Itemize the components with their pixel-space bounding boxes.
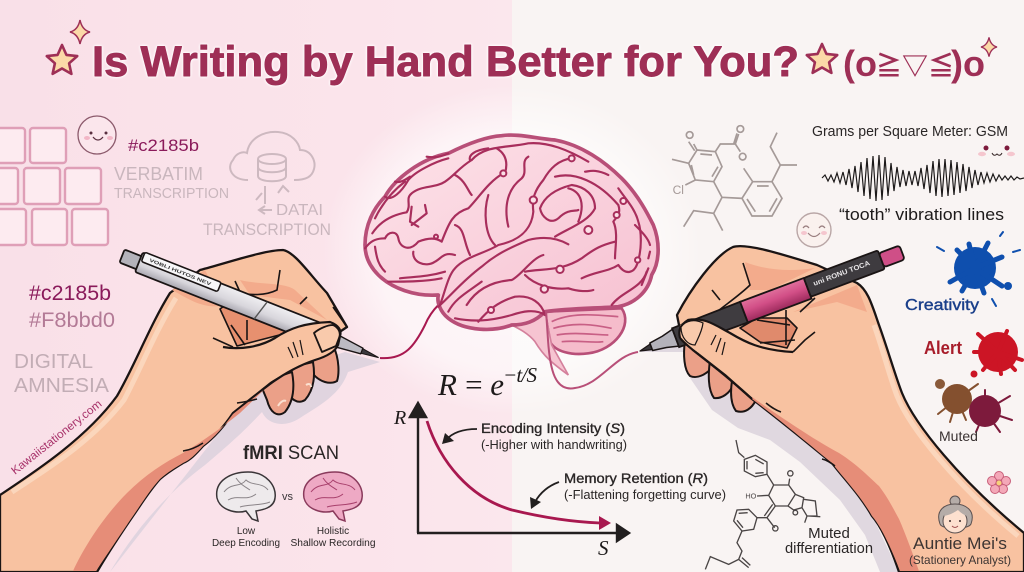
equation: R = e <box>437 367 504 402</box>
text: Auntie Mei's credit: (Stationery Analyst) <box>909 553 1011 567</box>
sulci <box>365 143 650 322</box>
pen tip cone <box>335 336 364 357</box>
label: muted: Muted <box>939 428 978 444</box>
retention curve <box>427 421 600 523</box>
splat: red alert <box>970 331 1022 378</box>
pen needle <box>361 349 380 360</box>
small brain captions <box>212 526 376 549</box>
text: GSM: Grams per Square Meter: GSM <box>812 123 1008 140</box>
small pink brain <box>304 472 362 521</box>
icon: smiley right <box>797 213 831 247</box>
text: muted differentiation <box>785 525 873 557</box>
pen body <box>740 278 812 322</box>
callout: encoding intensity: (-Higher with handwriting) <box>481 437 627 452</box>
pen grip <box>672 302 748 348</box>
pen needle tip <box>639 344 652 354</box>
cerebrum outline <box>365 135 658 329</box>
pen collar <box>254 300 267 321</box>
callout arrow memory <box>530 482 559 509</box>
text: colour codes and digital amnesia: DIGITAL <box>14 351 93 373</box>
background: right paper half <box>512 0 1024 572</box>
text: website along arm: Kawaiistationery.com <box>9 398 104 477</box>
title sparkle right <box>981 37 997 57</box>
fMRI comparison <box>212 443 376 549</box>
molecule chlorine label: Cl <box>673 183 684 197</box>
icon: flower <box>988 472 1010 494</box>
cerebellum <box>545 308 625 354</box>
text: muted differentiation: differentiation <box>785 540 873 557</box>
pen barrel <box>135 252 329 346</box>
kaomoji: )o <box>951 43 985 84</box>
text: Auntie Mei's credit <box>909 534 1011 567</box>
vs label: vs <box>282 491 294 503</box>
title sparkle left <box>70 20 90 44</box>
y axis <box>410 403 426 533</box>
ink line right pen to brainstem <box>546 310 638 388</box>
fMRI heading: fMRI SCAN <box>243 443 339 464</box>
pen brand text: VOBLI HUTOS NEV <box>149 258 213 287</box>
chart: forgetting curve <box>393 403 726 560</box>
text: Auntie Mei's credit: Auntie Mei's <box>913 534 1007 553</box>
small brain captions: Low <box>237 526 256 537</box>
kaomoji: ≧▽≦ <box>876 51 954 81</box>
text: tooth vibration lines: “tooth” vibration lines <box>839 205 1004 224</box>
keyboard keys <box>0 128 108 245</box>
palm recess <box>220 303 287 346</box>
thumbnail <box>681 321 703 345</box>
thumb wrinkles <box>288 340 303 358</box>
pen end cap <box>879 245 905 267</box>
wrist creases <box>183 399 257 451</box>
title <box>47 20 997 86</box>
text: data transcription: DATAI <box>276 202 323 219</box>
lower fingers <box>684 340 756 412</box>
thumbnail <box>314 325 340 352</box>
thumb outline <box>223 322 341 390</box>
splat: muted brown and maroon <box>935 379 1012 432</box>
callout: memory retention: Memory Retention ( R) <box>564 470 708 486</box>
knuckle creases <box>213 270 347 347</box>
pen tip collar <box>319 327 341 351</box>
equation: −t/S <box>503 363 538 387</box>
small brain captions: Shallow Recording <box>290 538 376 549</box>
retention curve arrowhead <box>599 516 611 530</box>
callout arrow encoding <box>442 429 477 444</box>
pen clip <box>141 252 221 292</box>
text: colour codes and digital amnesia: AMNESIA <box>14 375 110 397</box>
title star left <box>47 45 77 74</box>
lower fingers <box>262 345 338 414</box>
axis label S: S <box>598 536 609 560</box>
molecule: upper <box>672 126 797 231</box>
callout: encoding intensity: Encoding Intensity ( S) <box>481 420 625 436</box>
upper hand shading <box>172 270 327 340</box>
small brain captions: Holistic <box>317 526 349 537</box>
small brain captions: Deep Encoding <box>212 538 280 549</box>
callout: encoding intensity <box>481 420 627 452</box>
text: colour codes and digital amnesia: #F8bbd0 <box>29 309 115 332</box>
text: verbatim transcription: TRANSCRIPTION <box>114 185 229 202</box>
wrist crease <box>766 403 835 466</box>
text: data transcription <box>203 202 331 239</box>
thumb <box>680 320 793 398</box>
icon: small face above wave <box>978 146 1015 156</box>
brainstem <box>512 312 568 375</box>
equation <box>437 363 538 402</box>
text: data transcription: TRANSCRIPTION <box>203 220 331 239</box>
mechanical pen pink <box>636 243 906 361</box>
axis label R: R <box>393 407 406 429</box>
arm shading <box>73 388 266 571</box>
ink line left pen to brain <box>380 293 455 358</box>
text: colour codes and digital amnesia <box>14 282 115 397</box>
callout: memory retention <box>564 470 726 502</box>
text: hex code top: #c2185b <box>128 136 199 155</box>
icon: cloud database <box>230 132 314 214</box>
upper hand shading <box>745 262 867 312</box>
icon: Auntie Mei avatar <box>939 496 972 533</box>
small grey brain <box>217 472 275 521</box>
vibration wave <box>822 155 1024 201</box>
text: muted differentiation: Muted <box>808 525 850 542</box>
pen tip cone <box>648 329 679 355</box>
right hand with pen <box>636 243 1024 572</box>
arm shading <box>752 397 919 571</box>
label: alert: Alert <box>924 338 962 358</box>
knuckle creases <box>712 263 815 352</box>
brain <box>365 135 658 375</box>
arm and palm <box>677 246 1024 572</box>
molecule HO label: HO <box>745 492 757 501</box>
arm and palm <box>0 250 347 572</box>
background: left pink half <box>0 0 512 572</box>
hand cast shadow <box>110 352 380 572</box>
splat: blue creativity <box>937 232 1020 306</box>
palm recess <box>740 318 797 348</box>
hand cast shadow <box>640 340 899 572</box>
pen upper barrel <box>804 250 885 297</box>
molecule: lower <box>705 440 820 569</box>
text: colour codes and digital amnesia: #c2185b <box>29 282 111 305</box>
text: verbatim transcription: VERBATIM <box>114 164 203 184</box>
neuron nodes <box>434 155 640 313</box>
label: creativity: Creativity <box>905 297 979 314</box>
text: verbatim transcription <box>114 164 229 202</box>
thumb outline <box>679 319 793 399</box>
callout: memory retention: (-Flattening forgetting curve) <box>564 487 726 502</box>
left hand with pen <box>0 245 383 572</box>
arm light rim <box>12 298 176 492</box>
arm light rim <box>874 325 1018 536</box>
pen brand text: uni RONU TOCA <box>812 260 871 288</box>
thumb wrinkles <box>711 335 725 355</box>
title text: Is Writing by Hand Better for You? <box>92 38 799 86</box>
mechanical pen silver <box>118 245 383 367</box>
background: glow around brain <box>322 85 702 415</box>
kaomoji: (o <box>843 43 877 84</box>
thumb <box>223 322 341 395</box>
title star right <box>807 44 837 73</box>
x axis <box>417 525 629 541</box>
pen cap <box>119 249 145 271</box>
icon: smiley left <box>78 116 116 154</box>
fingernails lower <box>278 384 311 406</box>
